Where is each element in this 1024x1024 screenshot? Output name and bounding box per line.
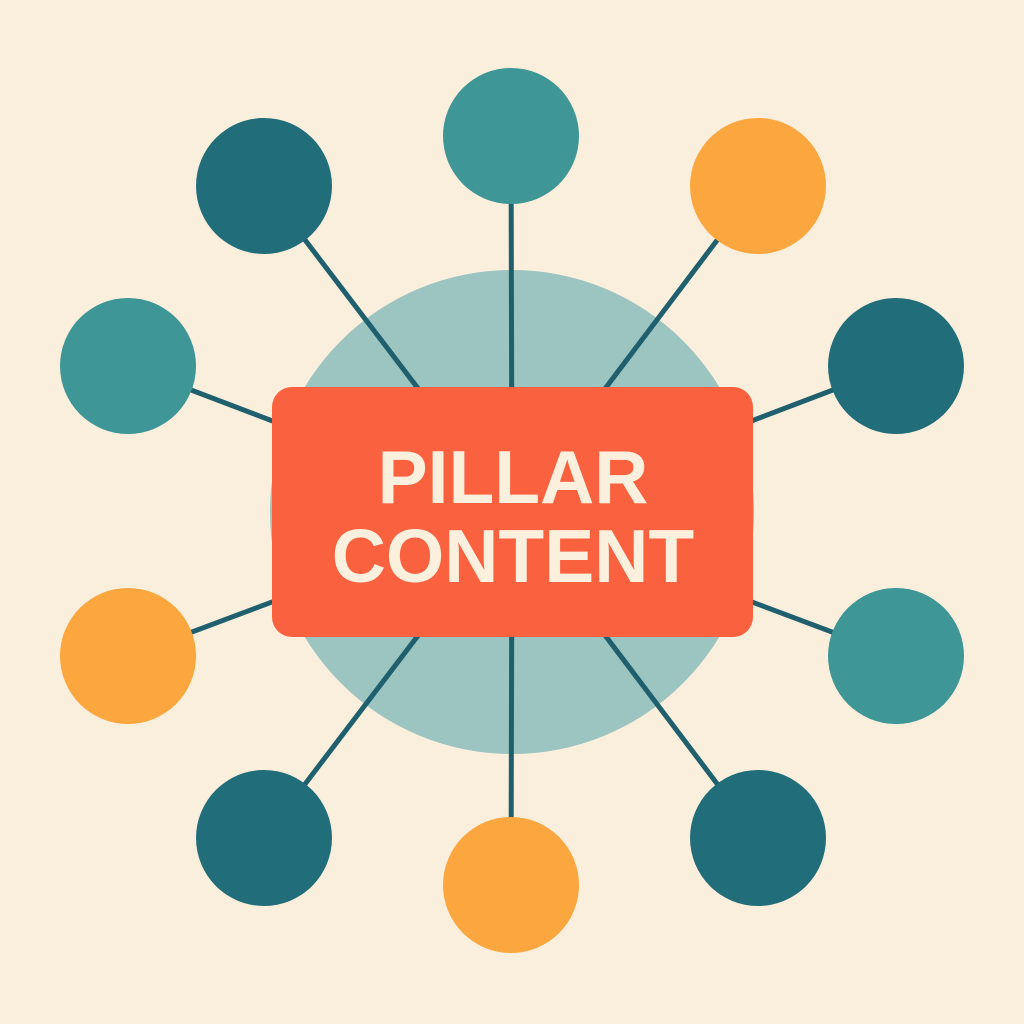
center box: pillar content	[272, 387, 753, 637]
center box: pillar content: PILLAR	[378, 435, 648, 519]
satellite circles	[60, 68, 964, 953]
center box: pillar content: CONTENT	[332, 514, 694, 598]
background hub circle	[270, 270, 754, 754]
connector lines	[128, 136, 896, 885]
